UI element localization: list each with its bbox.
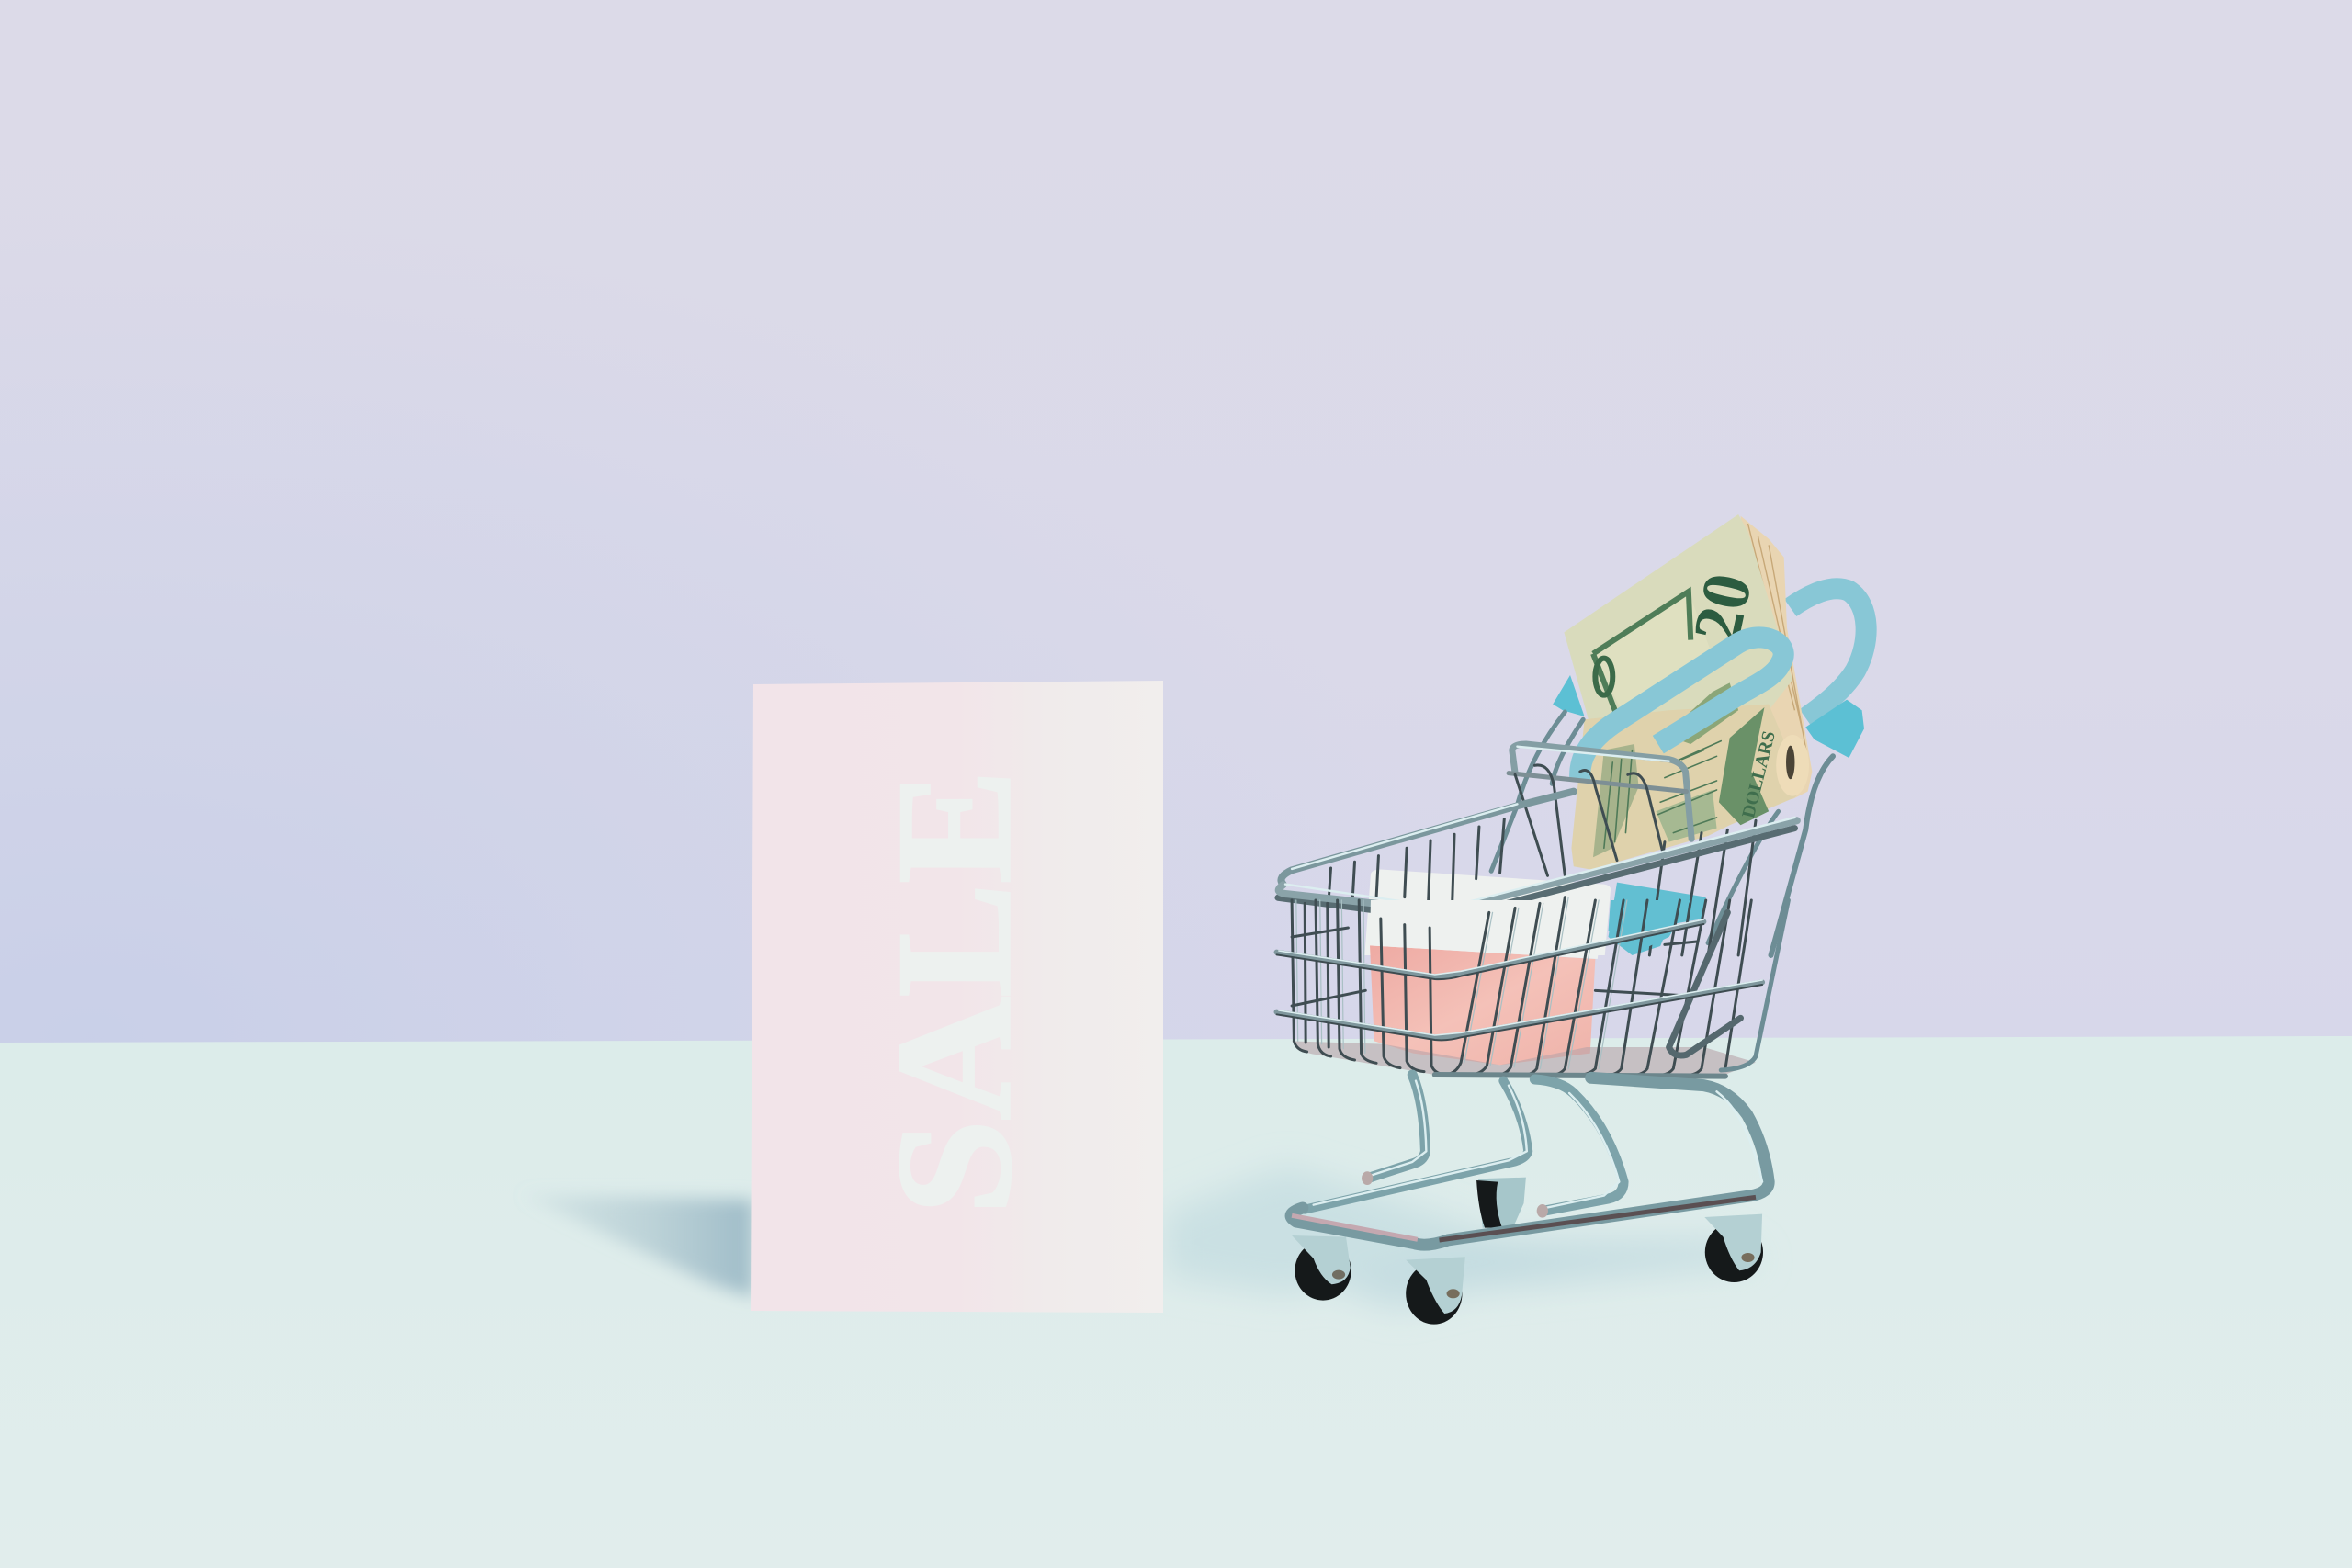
leg two xyxy=(1305,1081,1528,1210)
icon: handle clip right xyxy=(1805,700,1864,758)
bill inner panel xyxy=(1593,592,1713,710)
leg three xyxy=(1534,1079,1623,1211)
inner diagonal support xyxy=(1669,912,1740,1055)
pink box body in basket xyxy=(1370,945,1595,1065)
bill label: DOLLARS: DOLLARS xyxy=(1738,729,1780,820)
page edges of the fold xyxy=(1740,516,1812,799)
shopping cart upper part with money xyxy=(1278,514,1866,955)
cart handle stems xyxy=(1491,712,1833,955)
main base frame xyxy=(1291,1077,1769,1245)
shopping cart lower part with basket and wheels xyxy=(1277,897,1788,1325)
teal part lower xyxy=(1609,900,1690,949)
bill oval print xyxy=(1595,659,1612,695)
basket rear wires xyxy=(1329,819,1756,955)
green print areas xyxy=(1593,682,1769,857)
white box lower band xyxy=(1370,900,1606,959)
basket bottom edge xyxy=(1435,1075,1725,1077)
sale card xyxy=(751,681,1163,1313)
card text: SALE: SALE xyxy=(863,770,1045,1214)
icon: handle clip left xyxy=(1553,675,1585,716)
child seat wire frame xyxy=(1509,744,1691,875)
background: pale mint table surface xyxy=(0,1036,2352,1568)
money: folded twenty dollar bills xyxy=(1564,514,1812,870)
fine bill engraving lines xyxy=(1604,714,1725,848)
icon: front money clip loop xyxy=(1580,637,1783,781)
leg end cap three xyxy=(1537,1204,1548,1218)
shadow: cast by cart xyxy=(1165,1167,1764,1309)
bill denomination: 20: 20 xyxy=(1679,567,1767,649)
leg one xyxy=(1368,1075,1426,1179)
shadow: cast by sale card xyxy=(519,1194,753,1297)
card body xyxy=(751,681,1163,1313)
basket rail lower xyxy=(1277,980,1762,1040)
page edge lines xyxy=(1748,524,1808,760)
fold roll end xyxy=(1776,735,1809,796)
white box in basket xyxy=(1364,870,1611,955)
leg end cap one xyxy=(1362,1171,1373,1185)
front right wheel xyxy=(1704,1214,1763,1282)
lower bill face xyxy=(1571,705,1804,870)
top bill face xyxy=(1564,514,1792,750)
teal part behind basket xyxy=(1609,883,1706,955)
basket top rim xyxy=(1278,792,1797,919)
bill frame print xyxy=(1593,592,1690,714)
front centre wheel xyxy=(1406,1257,1465,1325)
basket rear inner bars xyxy=(1292,928,1697,1006)
basket rail upper xyxy=(1277,919,1703,979)
basket wire highlights xyxy=(1296,897,1627,1068)
basket floor grid xyxy=(1292,1041,1756,1077)
background: lavender wall xyxy=(0,0,2352,1047)
icon: back handle loop xyxy=(1791,589,1866,718)
back wheel xyxy=(1476,1178,1526,1228)
front left wheel xyxy=(1292,1235,1351,1301)
basket side wires xyxy=(1292,897,1751,1076)
right handle stem xyxy=(1721,900,1788,1070)
